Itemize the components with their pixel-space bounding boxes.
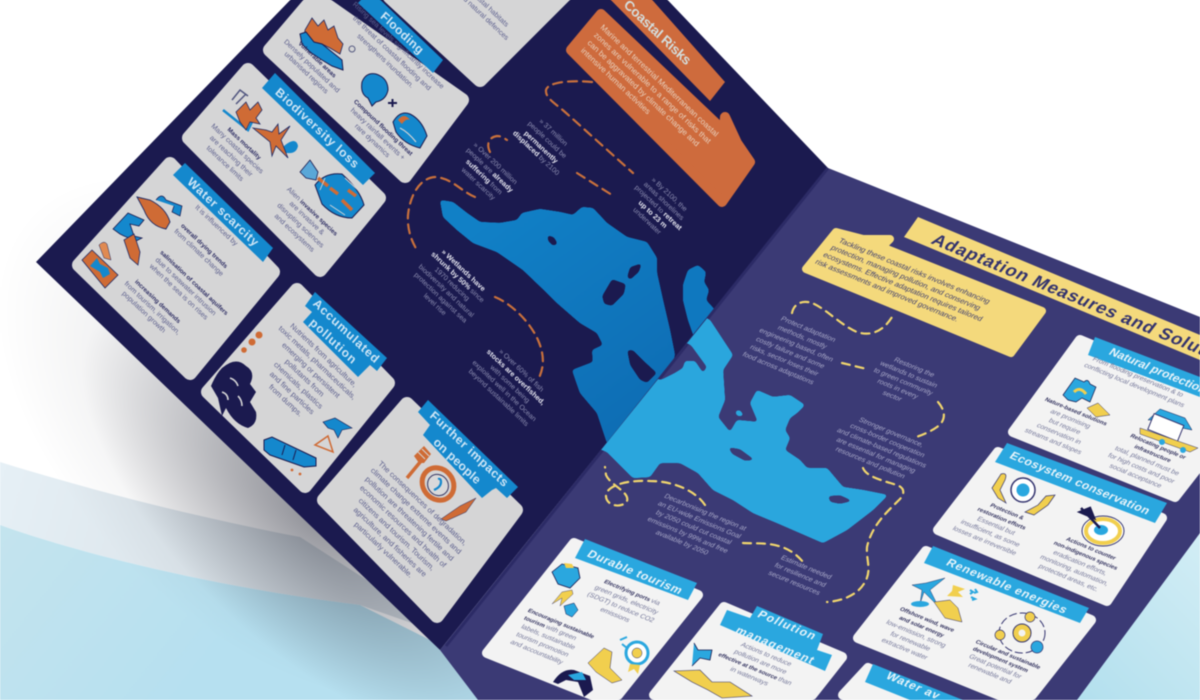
- heading ribbon: flooding: [358, 0, 443, 73]
- card: top partial: [390, 0, 570, 80]
- text: pollution management body: effective at the source than: [717, 652, 793, 687]
- text: pollution sources: chemicals, plastics: [272, 360, 325, 411]
- card: water availability: [843, 664, 963, 700]
- text: wetlands stat: biodiversity and natural: [417, 264, 475, 319]
- text: invasive species actions: monitoring, automation,: [1038, 554, 1110, 587]
- text: circular development: development system: [971, 647, 1029, 674]
- text: protection and restoration: Protection &: [988, 503, 1025, 522]
- heading ribbon: accumulated pollution: [303, 292, 387, 377]
- map: mediterranean left half: [440, 200, 714, 442]
- text: fish stocks stat: with some being: [488, 363, 531, 405]
- text: relocating people: Relocating people or: [1129, 434, 1187, 461]
- text: natural protection intro: From flooding preservation & to: [1091, 356, 1185, 399]
- text: mass mortality: tolerance limits: [205, 144, 245, 183]
- text: further impacts body: The consequences of degradation,: [377, 459, 469, 547]
- text: protection and restoration: losses are irreversible: [951, 526, 1018, 557]
- text: circular development: renewable and: [966, 663, 1013, 685]
- callout: coastal risks intro: intensive human activities: [579, 46, 652, 116]
- text: nature-based solutions: are promising: [1049, 409, 1092, 430]
- icon: invasive lionfish: [300, 160, 364, 218]
- icon: dark smoke: [211, 361, 256, 428]
- text: mass mortality: Many coastal species: [210, 122, 265, 176]
- text: flooding intro: the threat of coastal flooding and: [351, 14, 432, 92]
- text: vulnerable areas: Vulnerable areas: [297, 40, 338, 80]
- heading ribbon: durable tourism: Durable tourism: [584, 547, 686, 597]
- heading ribbon: biodiversity loss: [262, 73, 375, 185]
- text: investment note: Estimate needed: [779, 554, 833, 581]
- text: governance note: Stronger governance,: [857, 416, 925, 449]
- text: adaptation note two: wetlands to sustain: [877, 359, 939, 389]
- text: compound flooding: Compound flooding threat: [352, 98, 414, 157]
- text: vulnerable areas: urbanised regions: [283, 50, 330, 96]
- text: offshore wind: for renewable: [888, 631, 932, 653]
- heading: coastal risks ribbon: [605, 0, 725, 101]
- text: investment note: for resilience and: [773, 562, 828, 589]
- text: water scarcity causes: overall drying trends: [179, 223, 229, 271]
- text: pollution sources: toxic metals, pharmaceuticals,: [277, 324, 358, 401]
- text: water scarcity causes: from climate change: [173, 227, 225, 278]
- text: protection and restoration: insufficient, as some: [959, 519, 1021, 549]
- text: mass mortality: are reaching their: [208, 134, 254, 179]
- heading ribbon: renewable energies: Renewable energies: [943, 556, 1071, 616]
- heading ribbon: renewable energies: [924, 546, 1089, 623]
- heading ribbon: pollution management: [720, 606, 832, 671]
- text: wetlands stat: 1970 reducing: [433, 266, 470, 303]
- text: shoreline retreat stat: up to 23 m: [637, 198, 669, 230]
- text: relocating people: total, planned must be: [1113, 446, 1181, 477]
- text: pollution sources: Nutrients from agriculture,: [289, 321, 359, 389]
- text: mass mortality: Mass mortality: [226, 126, 262, 162]
- dashed connectors: yellow: [605, 302, 944, 602]
- map: mediterranean right half: [590, 312, 888, 543]
- text: fish stocks stat: stocks are overfished,: [485, 347, 547, 407]
- icon: flooded buildings: [300, 18, 355, 70]
- text: pollution management body: Actions to reduce: [739, 642, 793, 668]
- text: adaptation note one: engineering based, often: [757, 327, 835, 363]
- text: natural protection intro: conflicting local development plans: [1082, 362, 1186, 409]
- heading ribbon: accumulated pollution: Accumulated: [310, 296, 382, 366]
- text: pollution sources: pollutants from: [283, 357, 326, 399]
- icon: starfish: [253, 124, 298, 158]
- card: flooding: [270, 0, 462, 176]
- panel: left page coastal risks: [36, 0, 828, 650]
- text: decarbonisation note: Decarbonising the region at: [662, 493, 748, 532]
- text: offshore wind: Offshore wind, wave: [898, 607, 956, 634]
- heading ribbon: pollution management: Pollution: [755, 608, 819, 642]
- text: water scarcity causes: increasing demands: [133, 278, 182, 326]
- icon: wind turbine and solar: [911, 578, 977, 622]
- text: adaptation note two: sector: [881, 389, 904, 403]
- text: decarbonisation note: by 2050 could cut coastal: [654, 509, 734, 546]
- text: adaptation note one: risks, sector loses their: [748, 344, 821, 378]
- icon: floating particles: [241, 332, 262, 353]
- icon: dry basin: [82, 242, 118, 288]
- text: pollution management body: in waterways: [728, 666, 770, 687]
- text: invasive species actions: Actions to counter: [1064, 537, 1117, 562]
- icon: faucet and hand: [113, 213, 144, 265]
- text: wetlands stat: shrunk by 50% since: [430, 249, 485, 304]
- text: protection and restoration: Essential but: [975, 516, 1016, 537]
- text: further impacts body: economic resources and health of: [358, 483, 449, 570]
- text: sustainable tourism: tourism promotion: [514, 632, 570, 658]
- text: further impacts body: agriculture, and fisheries are: [352, 505, 428, 579]
- heading ribbon: durable tourism: [575, 539, 697, 600]
- icon: target and arrow: [1080, 508, 1124, 546]
- heading ribbon: accumulated pollution: pollution: [307, 315, 359, 367]
- text: pollution management body: pollution are more: [732, 649, 788, 676]
- text: nature-based solutions: conservation in: [1035, 423, 1082, 446]
- icon: plastic bottle: [264, 437, 316, 475]
- text: wetlands stat: » Wetlands have: [440, 247, 487, 293]
- text: further impacts body: particularly vulnerable.: [353, 520, 414, 580]
- text: flooding intro: strengthens inundation.: [355, 32, 415, 90]
- text: water scarcity causes: It is influenced by: [193, 203, 239, 248]
- card: pollution management: [654, 606, 842, 698]
- callout: adaptation intro: protection, managing pollution, and conserving: [829, 244, 983, 312]
- text: further impacts body: citizens and tourism. Tourism,: [357, 496, 436, 572]
- text: wetlands stat: protection against sea: [413, 272, 468, 325]
- text: displaced people stat: permanently: [523, 129, 560, 165]
- text: water scarcity causes: from tourism, irrigation,: [123, 280, 182, 336]
- text: shoreline retreat stat: areas shorelines: [642, 181, 685, 222]
- dashed connectors: orange: [408, 81, 633, 380]
- icon: polluted river: [674, 643, 752, 698]
- text: invasive species actions: eradication efforts,: [1051, 550, 1108, 577]
- text: water scarcity stat: » Over 200 million: [472, 142, 518, 186]
- text: wetlands stat: level rise: [422, 293, 447, 317]
- text: governance note: are essential for managing: [835, 436, 917, 475]
- card: further impacts on people: [324, 400, 518, 616]
- text: electrifying ports: green grids, electricity: [593, 585, 660, 616]
- text: decarbonisation note: emissions by 99% and free: [646, 516, 730, 555]
- text: adaptation note one: Protect adaptation: [779, 315, 837, 344]
- text: water scarcity causes: due to seawater intrusion: [154, 256, 217, 317]
- callout: adaptation intro: risk assessments and improved governance.: [813, 258, 961, 323]
- text: pollution sources: and fine particles: [268, 369, 316, 416]
- icon: plate and cutlery: [407, 446, 476, 521]
- text: offshore wind: and solar energy: [897, 616, 946, 639]
- text: adaptation note one: food across adaptations: [741, 351, 816, 386]
- text: invasive species: disrupting sciences: [276, 201, 326, 250]
- text: fish stocks stat: beyond sustainable limits: [467, 368, 530, 428]
- heading ribbon: ecosystem conservation: Ecosystem conservation: [1007, 449, 1153, 517]
- text: further impacts body: climate change extreme events and: [369, 466, 463, 556]
- callout: adaptation intro: [806, 232, 1042, 353]
- card: ecosystem conservation: [938, 443, 1167, 601]
- callout: coastal risks intro: zones are vulnerable to a range of risks that: [592, 30, 713, 146]
- text: displaced people stat: people could be: [526, 120, 567, 160]
- text: offshore wind: extractive water: [880, 637, 929, 662]
- text: protection and restoration: restoration efforts: [976, 507, 1027, 532]
- text: investment note: secure resources: [766, 569, 822, 597]
- text: shoreline retreat stat: underwater: [631, 207, 662, 237]
- text: circular development: Great potential for: [967, 654, 1023, 681]
- icon: amphora: [137, 196, 182, 229]
- text: nature-based solutions: streams and slopes: [1023, 428, 1083, 456]
- card: accumulated pollution: [208, 290, 388, 486]
- text: adaptation note one: methods, mostly: [776, 324, 829, 350]
- text: sustainable tourism: labels, sustainable: [519, 624, 577, 651]
- card: renewable energies: [858, 546, 1091, 695]
- text: relocating people: infrastructure: [1132, 444, 1173, 464]
- text: vulnerable areas: Densely populated and: [282, 38, 341, 95]
- text: fish stocks stat: exploited well in the Ocean: [471, 359, 537, 423]
- text: electrifying ports: emissions: [598, 607, 632, 624]
- text: invasive species actions: non-indigenous species: [1052, 541, 1119, 572]
- heading ribbon: flooding: Flooding: [378, 9, 426, 57]
- text: adaptation note two: to green community: [872, 367, 935, 397]
- card: water scarcity: [79, 163, 273, 373]
- heading ribbon: pollution management: management: [733, 624, 817, 666]
- text: water scarcity causes: salinisation of coastal aquifers: [158, 249, 230, 317]
- heading ribbon: water scarcity: [173, 163, 273, 262]
- text: electrifying ports: (SDGT) to reduce CO2: [585, 591, 655, 624]
- text: invasive species: are invasive &: [288, 200, 326, 237]
- text: displaced people stat: » 37 million: [538, 118, 568, 148]
- card: natural protection: [1013, 337, 1200, 497]
- text: further impacts body: pollution are threatening fertile and: [364, 475, 456, 563]
- text: displaced people stat: displaced by 2100: [511, 128, 560, 177]
- card: durable tourism: [487, 539, 698, 697]
- icon: hands around globe: [992, 474, 1055, 515]
- icon: coral: [223, 90, 262, 130]
- text: adaptation note two: Restoring the: [892, 356, 936, 379]
- text: relocating people: for high costs and poor: [1106, 453, 1176, 485]
- text: nature-based solutions: but require: [1047, 418, 1082, 436]
- callout: coastal risks intro: Marine and terrestrial Mediterranean coastal: [599, 23, 720, 139]
- heading ribbon: water scarcity: Water scarcity: [185, 175, 261, 249]
- text: governance note: and climate-based regulations: [835, 427, 929, 470]
- text: sustainable tourism: tourism with green: [522, 616, 578, 642]
- icon: storm cloud and wave: [362, 74, 427, 148]
- heading ribbon: further impacts: on people: [431, 435, 484, 487]
- callout: adaptation intro: Tackling these coastal risks involves enhancing: [837, 236, 992, 306]
- text: relocating people: social acceptance: [1108, 463, 1163, 490]
- icon: puzzle piece: [1063, 378, 1110, 417]
- icon: sea turtle and shoe: [553, 670, 593, 697]
- text: offshore wind: low-emission, strong: [884, 619, 947, 649]
- heading ribbon: biodiversity loss: Biodiversity loss: [273, 85, 362, 171]
- text: decarbonisation note: available by 2050: [654, 529, 710, 556]
- text: electrifying ports: Electrifying ports via: [602, 579, 662, 607]
- text: invasive species: and ecosystems: [273, 212, 316, 254]
- callout: coastal risks intro: can be aggravated by climate change and: [586, 38, 701, 148]
- panel: right page adaptation measures: [440, 168, 1200, 700]
- text: adaptation note two: roots in every: [875, 378, 920, 400]
- text: adaptation note one: costly failure and some: [754, 336, 826, 370]
- text: water scarcity causes: when the sea is on rises: [147, 262, 210, 322]
- card: biodiversity loss: [189, 70, 379, 270]
- text: governance note: resources and pollution: [834, 446, 907, 480]
- icon: warning triangle and palm: [315, 418, 352, 452]
- text: pollution sources: from dumps.: [267, 382, 304, 419]
- text: circular development: Circular and sustainable: [974, 640, 1042, 671]
- text: shoreline retreat stat: projected to retreat: [633, 184, 684, 232]
- text: water scarcity stat: suffering from: [464, 157, 503, 196]
- icon: award badge and coins: [588, 637, 648, 683]
- icon: relocated house on truck: [1140, 409, 1198, 453]
- icon: port and energy: [552, 563, 580, 617]
- text: pollution sources: emerging or persistent: [280, 340, 342, 401]
- icon: circular economy gears: [995, 612, 1045, 653]
- text: water scarcity causes: population growth: [120, 289, 167, 335]
- text: flooding intro: Rising sea levels significantly increase: [351, 0, 445, 91]
- text: invasive species actions: protected areas, etc.: [1037, 563, 1100, 593]
- text: water scarcity stat: people are already: [465, 147, 515, 194]
- text: water scarcity stat: water scarcity: [459, 166, 496, 202]
- text: nature-based solutions: Nature-based solutions: [1043, 397, 1109, 427]
- text: shoreline retreat stat: » By 2100, the: [650, 176, 688, 213]
- text: decarbonisation note: an EU-wide Emissions Goal: [656, 500, 743, 540]
- callout: adaptation intro: ecosystems. Effective adaptation requires tailored: [821, 251, 985, 323]
- text: compound flooding: heavy rainfall events +: [349, 106, 406, 162]
- text: compound flooding: rare dynamics: [353, 122, 391, 160]
- heading ribbon: further impacts: Further impacts: [427, 408, 511, 490]
- callout: coastal risks intro: [571, 14, 750, 202]
- text: sustainable tourism: and accountability: [509, 639, 565, 666]
- heading ribbon: further impacts: [418, 400, 518, 498]
- text: sustainable tourism: Encouraging sustainable: [526, 608, 596, 640]
- text: invasive species: Alien invasive species: [285, 185, 339, 238]
- text: fish stocks stat: » Over 60% of fish: [497, 348, 545, 394]
- text: governance note: cross-border cooperation: [848, 422, 927, 459]
